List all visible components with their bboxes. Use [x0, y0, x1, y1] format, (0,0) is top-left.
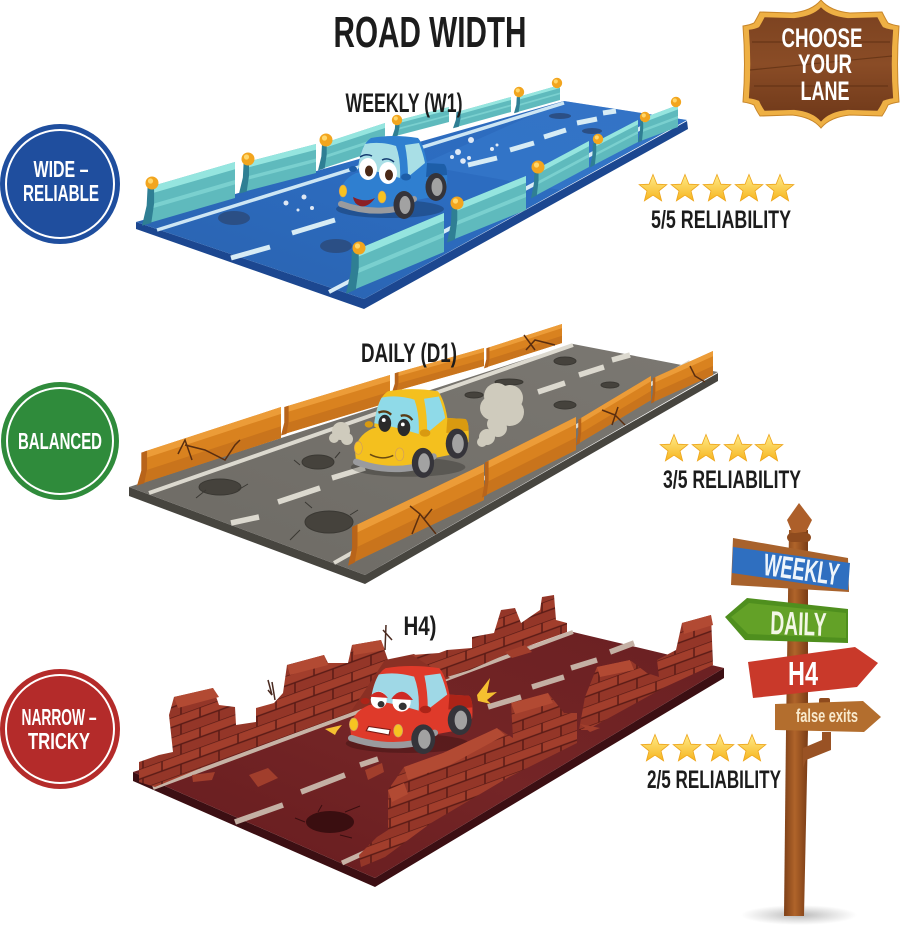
wooden sign: choose your lane: LANE	[800, 76, 850, 106]
sign: false exits: false exits	[796, 706, 858, 726]
rating: daily	[660, 434, 801, 494]
panel: h4 road	[133, 595, 724, 887]
wooden sign: choose your lane: YOUR	[798, 49, 852, 79]
wooden sign: choose your lane: CHOOSE	[782, 23, 862, 53]
badge: wide reliable: WIDE –	[34, 156, 89, 182]
panel: daily road	[129, 324, 718, 584]
badge: narrow tricky: TRICKY	[28, 728, 90, 754]
car: red	[346, 666, 472, 754]
rating: daily: 3/5 RELIABILITY	[663, 466, 801, 494]
sign: weekly	[731, 538, 850, 592]
title: ROAD WIDTH	[334, 8, 526, 57]
badge: narrow tricky	[0, 669, 120, 789]
rating: weekly	[639, 174, 794, 234]
sign: h4: H4	[788, 655, 818, 692]
sign: h4	[748, 647, 878, 698]
car: yellow	[351, 389, 469, 478]
rating: h4	[641, 734, 781, 794]
sign: daily: DAILY	[770, 604, 827, 643]
wooden sign: choose your lane	[743, 0, 899, 128]
sign: false exits	[775, 701, 881, 732]
badge: balanced: BALANCED	[18, 428, 102, 454]
sign: daily	[725, 598, 848, 643]
badge: narrow tricky: NARROW –	[22, 704, 97, 730]
panel: weekly road	[136, 78, 688, 309]
label: weekly: WEEKLY (W1)	[346, 88, 462, 118]
sign: weekly: WEEKLY	[761, 547, 842, 592]
rating: h4: 2/5 RELIABILITY	[647, 766, 781, 794]
label: daily: DAILY (D1)	[361, 338, 457, 368]
badge: wide reliable: RELIABLE	[23, 180, 99, 206]
signpost	[725, 503, 881, 925]
badge: wide reliable	[0, 124, 120, 244]
label: h4: H4)	[404, 611, 436, 641]
rating: weekly: 5/5 RELIABILITY	[651, 206, 791, 234]
badge: balanced	[1, 382, 119, 500]
car: blue	[336, 136, 447, 219]
